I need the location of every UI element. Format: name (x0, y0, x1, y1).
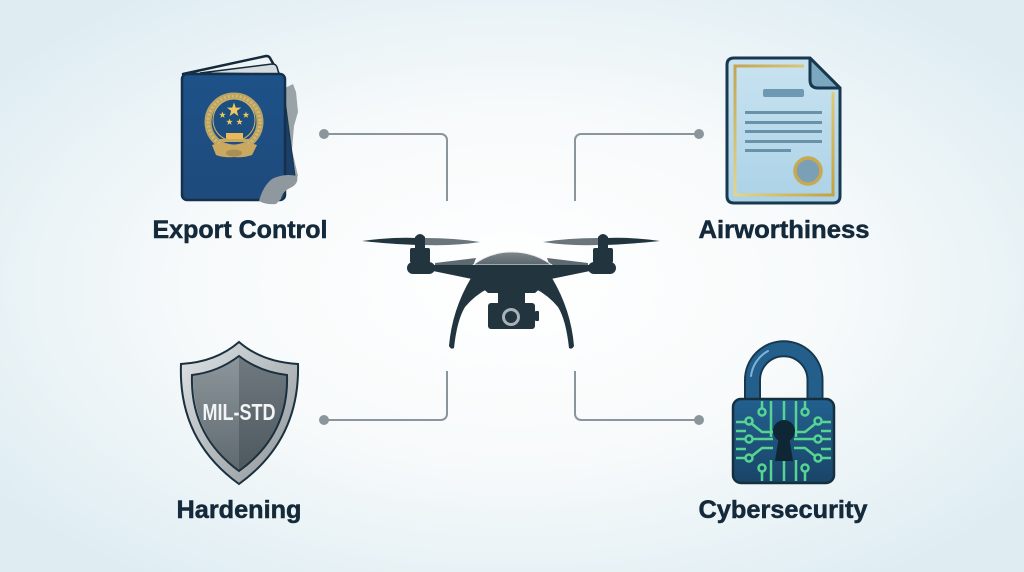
inner left half (193, 356, 239, 470)
ribbon (212, 143, 257, 157)
connector: airworthiness (575, 129, 704, 201)
left propeller (362, 234, 480, 248)
wreath ring (208, 96, 260, 148)
passport cover (182, 74, 285, 200)
landing legs (449, 278, 574, 349)
label: Airworthiness: Airworthiness (698, 216, 870, 244)
lock body (733, 399, 834, 483)
emblem (208, 96, 260, 157)
connector: hardening (319, 371, 447, 425)
body (433, 265, 590, 293)
gray arms (435, 258, 588, 266)
label: Export Control: Export Control (152, 216, 328, 244)
text lines (745, 111, 822, 152)
label: Cybersecurity: Cybersecurity (698, 496, 868, 524)
peeled corner (259, 175, 297, 204)
connector: cybersecurity (575, 371, 704, 425)
circuit traces (736, 401, 831, 481)
outer shield (181, 342, 298, 484)
label: Hardening: Hardening (176, 496, 302, 524)
shackle (752, 349, 815, 400)
shield text: MIL-STD (202, 399, 276, 425)
icon: passport (182, 56, 298, 204)
shackle highlight (751, 351, 768, 376)
icon: padlock (733, 349, 834, 483)
icon: drone (362, 234, 660, 349)
passport pages (183, 56, 279, 74)
gate (226, 133, 243, 139)
icon: certificate (727, 58, 840, 203)
keyhole (773, 420, 795, 461)
gold border (735, 66, 833, 195)
right propeller (543, 234, 660, 248)
title bar (763, 89, 804, 97)
inner outline (192, 356, 287, 471)
gimbal mount (498, 293, 525, 303)
folded corner (810, 58, 840, 88)
camera (488, 303, 539, 329)
sheet (727, 58, 840, 203)
connector: export control (319, 129, 447, 201)
motors (407, 248, 616, 274)
torn back cover (285, 84, 298, 190)
seal (795, 158, 821, 184)
inner right half (239, 356, 287, 470)
stars (219, 102, 249, 125)
emblem field (213, 99, 255, 141)
icon: shield (181, 342, 298, 484)
dome (473, 252, 552, 265)
